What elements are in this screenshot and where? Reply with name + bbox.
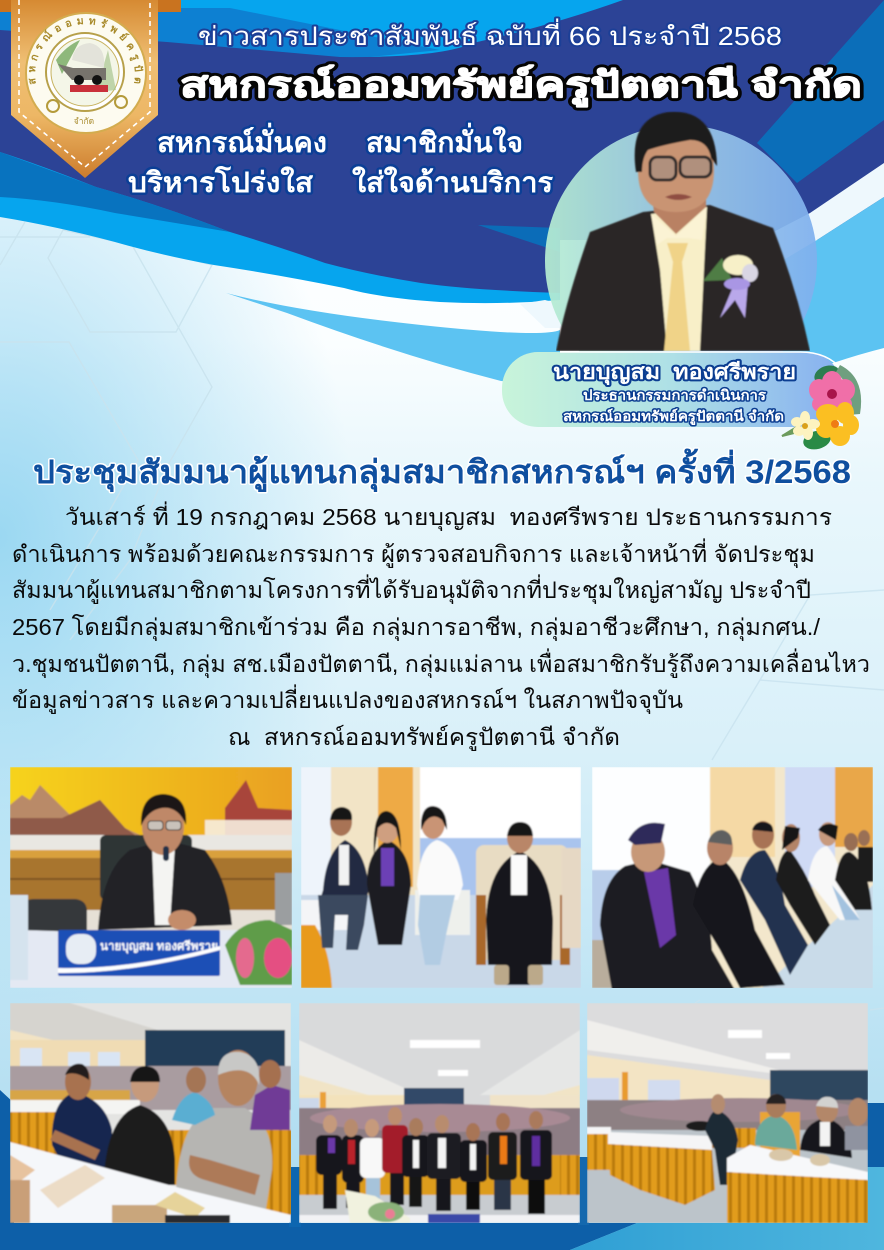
main title: สหกรณ์ออมทรัพย์ครูปัตตานี จำกัด — [180, 64, 862, 108]
neck and face — [650, 178, 706, 234]
light blue lower wedge — [226, 293, 560, 385]
issue line: ข่าวสารประชาสัมพันธ์ ฉบับที่ 66 ประจำปี 2568 — [198, 18, 782, 51]
photo: chairman at desk — [10, 767, 292, 988]
glasses — [650, 157, 711, 180]
slogan block: บริหารโปร่งใส — [128, 165, 314, 198]
small wedge near portrait — [478, 225, 560, 252]
suit — [556, 205, 810, 351]
main title: สหกรณ์ออมทรัพย์ครูปัตตานี จำกัด — [180, 64, 862, 108]
corsage — [703, 255, 758, 318]
slogan block: สหกรณ์มั่นคง — [157, 122, 327, 158]
tie — [664, 243, 690, 351]
photo: four people seated — [301, 767, 581, 988]
body paragraph: 2567 โดยมีกลุ่มสมาชิกเข้าร่วม คือ กลุ่มการอาชีพ, กลุ่มอาชีวะศึกษา, กลุ่มกศน./ — [12, 614, 821, 641]
shirt — [651, 207, 707, 351]
photo: audience close up — [10, 1003, 292, 1223]
slogan block: สมาชิกมั่นใจ — [366, 122, 523, 158]
gold ribbon badge — [0, 0, 181, 178]
dark blue left wedge — [0, 152, 230, 232]
sky blue band — [0, 0, 884, 303]
position line 2: สหกรณ์ออมทรัพย์ครูปัตตานี จำกัด — [563, 408, 784, 425]
body paragraph: ว.ชุมชนปัตตานี, กลุ่ม สช.เมืองปัตตานี, กลุ่มแม่ลาน เพื่อสมาชิกรับรู้ถึงความเคลื่อนไหว — [12, 648, 870, 678]
right light blue panel — [780, 197, 884, 380]
seal caption: จำกัด — [74, 116, 94, 126]
body paragraph: สัมมนาผู้แทนสมาชิกตามโครงการที่ได้รับอนุมัติจากที่ประชุมใหญ่สามัญ ประจำปี — [12, 574, 811, 604]
photo: group standing in hall — [299, 1003, 580, 1223]
name plate — [502, 352, 842, 427]
position line 1: ประธานกรรมการดำเนินการ — [583, 387, 767, 403]
body paragraph: ข้อมูลข่าวสาร และความเปลี่ยนแปลงของสหกรณ์ฯ ในสภาพปัจจุบัน — [12, 684, 683, 714]
hibiscus yellow — [816, 402, 859, 446]
seal logo — [25, 12, 147, 134]
body paragraph: วันเสาร์ ที่ 19 กรกฎาคม 2568 นายบุญสม ทองศรีพราย ประธานกรรมการ — [65, 501, 832, 531]
hexagon background pattern — [0, 222, 884, 1010]
right blue wedge — [757, 0, 884, 183]
slogan block — [128, 122, 553, 198]
hair — [635, 112, 717, 172]
footer shapes — [0, 1090, 884, 1250]
photo: row of seated members — [592, 767, 873, 990]
photo: tables and attendees — [587, 1003, 868, 1223]
white swoosh — [520, 163, 884, 328]
body paragraph: ดำเนินการ พร้อมด้วยคณะกรรมการ ผู้ตรวจสอบกิจการ และเจ้าหน้าที่ จัดประชุม — [12, 538, 815, 568]
photo: chairman at desk: นายบุญสม ทองศรีพราย — [100, 939, 218, 954]
portrait circle — [545, 125, 817, 397]
name: นายบุญสม ทองศรีพราย — [553, 360, 796, 386]
section heading: ประชุมสัมมนาผู้แทนกลุ่มสมาชิกสหกรณ์ฯ ครั้งที่ 3/2568 — [33, 448, 851, 493]
body paragraph — [12, 501, 870, 751]
slogan block: ใส่ใจด้านบริการ — [352, 166, 553, 198]
header wave background — [0, 0, 884, 385]
hibiscus pink — [809, 371, 855, 413]
top mid blue band — [0, 8, 440, 60]
body paragraph: ณ สหกรณ์ออมทรัพย์ครูปัตตานี จำกัด — [228, 724, 620, 751]
navy main band — [0, 0, 884, 293]
portrait — [545, 112, 817, 397]
tropical flowers — [782, 362, 861, 452]
small cream flower — [791, 411, 820, 440]
